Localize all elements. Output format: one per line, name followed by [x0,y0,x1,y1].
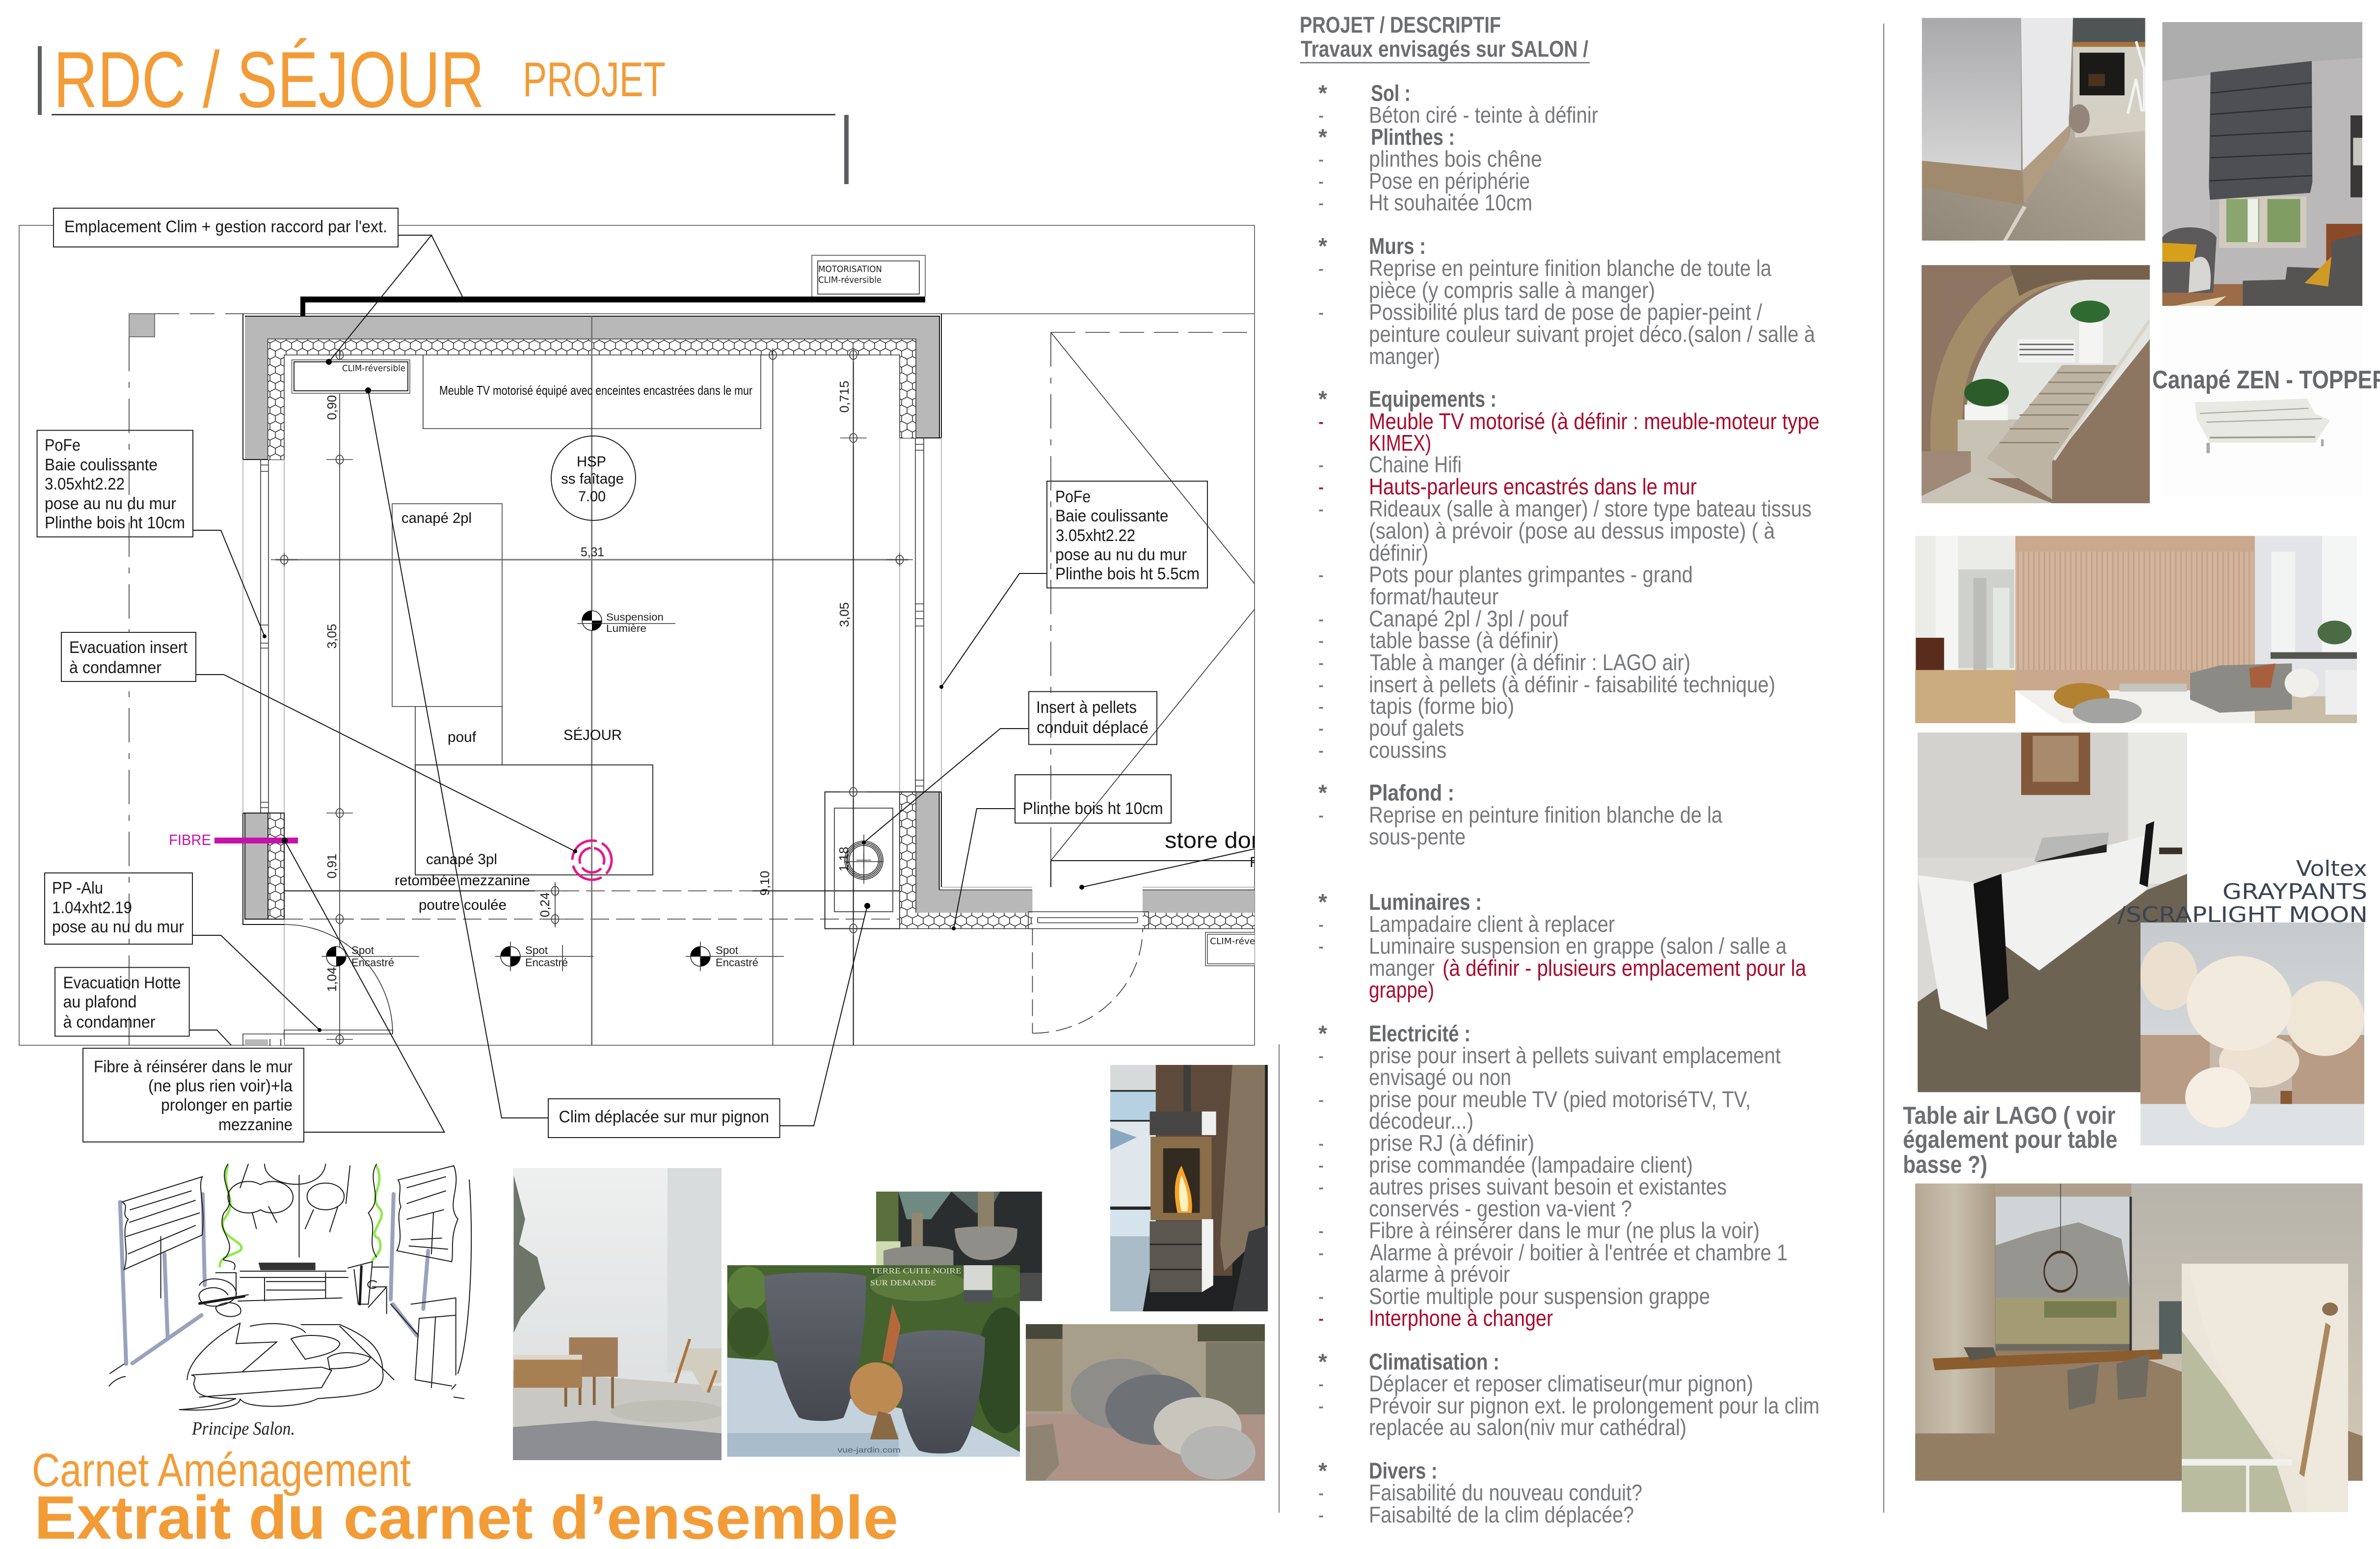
photo: sphères [1026,1324,1265,1481]
text block: équipements: - [1318,650,1324,675]
text block: plafond [1318,780,1722,849]
furniture: pouf: pouf [448,729,477,745]
text block: équipements: - [1318,672,1324,697]
text block: plafond: * [1318,780,1327,806]
callout: emplacement clim [53,208,398,247]
text block: équipements: - [1318,474,1324,499]
text block: équipements: Hauts-parleurs encastrés dans le mur [1369,474,1697,499]
text block: luminaires: - [1318,911,1324,937]
dimensions: 9,10 [757,871,772,896]
callout: évacuation hotte: au plafond [63,993,136,1011]
text block: sol et plinthes: plinthes bois chêne [1369,146,1542,172]
text block: sol et plinthes: Ht souhaitée 10cm [1369,190,1532,216]
sketch signature: Principe Salon. [191,1418,295,1439]
text block: équipements: Chaine Hifi [1369,452,1462,477]
photo: meuble TV [1918,733,2187,1092]
spot 2: Encastré [525,956,568,969]
text block: luminaires: Lampadaire client à replacer [1369,911,1615,937]
text block: sol et plinthes: Sol : [1371,81,1411,106]
text block: équipements: (salon) à prévoir (pose au dessus imposte) ( à [1369,518,1775,544]
dimensions: 1,18 [836,847,851,871]
text block: électricité [1318,1021,1788,1331]
text block: murs: Reprise en peinture finition blanche de toute la [1369,255,1771,281]
spot 2: Spot [525,944,548,956]
label: séjour: SÉJOUR [563,727,622,743]
spot 3: Spot [716,944,738,956]
text block: climatisation: - [1318,1371,1324,1396]
dimensions [324,380,852,992]
text block: équipements: - [1318,562,1324,587]
photo: poêle [1110,1065,1268,1311]
callout: insert à pellets: conduit déplacé [1037,718,1149,737]
furniture: canapé 2pl [392,504,502,707]
callout: PoFe droite [1047,481,1207,588]
text block: luminaires: Luminaire suspension en grappe (salon / salle a [1369,933,1787,959]
callout: plinthe bois: Plinthe bois ht 10cm [1023,799,1163,818]
clim box [292,360,410,393]
callout: fibre: Fibre à réinsérer dans le mur [94,1058,293,1076]
text block: sol et plinthes: * [1318,81,1327,106]
callout: PP-Alu: PP -Alu [52,879,103,897]
suspension symbol [577,611,675,634]
text block: électricité: prise pour insert à pellets suivant emplacement [1369,1043,1781,1068]
HSP circle: ss faîtage [561,471,624,487]
dimensions: 1,04 [324,967,339,992]
text block: divers: Faisabilité du nouveau conduit? [1369,1480,1642,1505]
label: table air LAGO: également pour table [1903,1126,2117,1153]
HSP circle: HSP [577,454,606,470]
callout: PoFe droite: 3.05xht2.22 [1056,526,1135,545]
descriptive column heading: Travaux envisagés sur SALON / [1301,36,1588,62]
spot 1: Spot [351,944,374,956]
vertical divider left [1279,1044,1280,1513]
text block: luminaires [1318,889,1806,1003]
dimensions: 0,91 [324,854,339,878]
label: voltex graypants: GRAYPANTS [2222,879,2367,904]
clim box bottom right: CLIM-réver [1210,936,1259,947]
text block: électricité: prise commandée (lampadaire client) [1369,1152,1693,1177]
text block: électricité: - [1318,1305,1324,1331]
text block: équipements: - [1318,715,1324,741]
text block: équipements: insert à pellets (à définir - faisabilité technique) [1369,672,1775,697]
text block: sol et plinthes: Béton ciré - teinte à définir [1369,102,1598,128]
text block: climatisation: * [1318,1349,1327,1375]
text block: électricité: prise RJ (à définir) [1369,1130,1534,1156]
text block: électricité: autres prises suivant besoin et existantes [1369,1174,1727,1199]
photo: plinthe [1922,18,2145,241]
label: retombée mezzanine: retombée mezzanine [395,872,530,889]
callout: PoFe droite: Plinthe bois ht 5.5cm [1055,565,1200,583]
motorisation box: MOTORISATION [818,264,882,274]
text block: luminaires: (à définir - plusieurs emplacement pour la [1443,955,1806,981]
callout: PoFe gauche [37,430,193,537]
text block: luminaires: grappe) [1369,977,1434,1003]
spot 3 [686,942,784,971]
callout: PoFe droite: PoFe [1055,488,1091,506]
text block: climatisation: Climatisation : [1369,1349,1499,1375]
photo: pots petits [876,1192,1042,1301]
text block: équipements: coussins [1369,737,1446,763]
text block: équipements: - [1318,496,1324,521]
callout: plinthe bois [1015,775,1171,823]
callout: PP-Alu: 1.04xht2.19 [52,898,132,917]
label: store dor: store dor [1165,827,1259,853]
insert à pellets symbol [845,841,883,879]
label: F: F [1250,854,1258,870]
text block: climatisation [1318,1349,1819,1440]
text block: électricité: Interphone à changer [1369,1305,1553,1331]
text block: sol et plinthes: - [1318,190,1324,216]
text block: murs: pièce (y compris salle à manger) [1369,277,1655,303]
text block: luminaires: manger [1369,955,1435,981]
text block: plafond: Plafond : [1369,780,1454,806]
clim box bottom right [1205,932,1255,966]
text block: murs: manger) [1369,344,1440,369]
text block: plafond: sous-pente [1369,824,1466,849]
label: poutre coulée: poutre coulée [419,897,507,913]
right wall and insert [825,792,900,929]
text block: murs: - [1318,255,1324,281]
text block: équipements: Pots pour plantes grimpantes - grand [1369,562,1693,587]
label: voltex graypants [2117,856,2368,927]
text block: plafond: Reprise en peinture finition blanche de la [1369,802,1722,828]
magenta target [565,833,619,887]
dimensions: 5,31 [581,544,604,559]
fibre marker: FIBRE [169,831,211,848]
text block: électricité: Alarme à prévoir / boitier à l'entrée et chambre 1 [1370,1240,1788,1265]
photo: pots noirs [727,1265,1020,1457]
text block: équipements: - [1318,452,1324,477]
text block: équipements: * [1318,386,1327,411]
text block: équipements: Canapé 2pl / 3pl / pouf [1369,606,1568,631]
furniture: canapé 3pl: canapé 3pl [426,851,497,868]
callout: PoFe gauche: PoFe [45,436,80,455]
text block: électricité: Electricité : [1369,1021,1471,1046]
photo: canapé blanc [2195,399,2330,453]
callout: clim déplacée: Clim déplacée sur mur pignon [559,1108,769,1126]
vertical divider right [1883,24,1884,1513]
text block: climatisation: Déplacer et reposer climatiseur(mur pignon) [1369,1371,1753,1396]
text block: électricité: conservés - gestion va-vient ? [1369,1196,1632,1222]
suspension symbol: Lumière [606,623,646,634]
label: table air LAGO: Table air LAGO ( voir [1903,1102,2115,1129]
callout: évacuation hotte: à condamner [63,1013,155,1032]
bottom titles: Carnet Aménagement [32,1444,411,1496]
text block: murs: - [1318,299,1324,325]
callout: insert à pellets [1029,692,1157,744]
photo: escalier béton [1922,265,2150,503]
callout: PoFe gauche: Baie coulissante [45,456,158,474]
text block: luminaires: * [1318,889,1327,915]
text block: sol et plinthes: - [1318,146,1324,172]
HSP circle: 7.00 [578,489,606,505]
callout: évacuation hotte: Evacuation Hotte [63,974,181,992]
label: voltex graypants: /SCRAPLIGHT MOON [2117,902,2368,927]
text block: murs: peinture couleur suivant projet déco.(salon / salle à [1369,322,1815,347]
text block: équipements: Meuble TV motorisé (à définir : meuble-moteur type [1369,408,1819,434]
text block: sol et plinthes: - [1318,168,1324,193]
text block: électricité: alarme à prévoir [1369,1261,1510,1287]
text block: électricité: - [1318,1174,1324,1199]
plan frame [19,225,1255,1045]
text block: équipements: - [1318,408,1324,434]
descriptive column heading: PROJET / DESCRIPTIF [1300,12,1501,38]
spot 1: Encastré [351,956,394,969]
callout: évacuation insert [61,632,196,681]
text block: divers: - [1318,1502,1324,1527]
label: table air LAGO: basse ?) [1903,1151,1987,1178]
label: voltex graypants: Voltex [2296,856,2367,881]
text block: électricité: - [1318,1130,1324,1156]
text block: divers: - [1318,1480,1324,1505]
text block: équipements [1318,386,1819,763]
text block: équipements: - [1318,627,1324,653]
thick clim line [300,297,925,316]
photo: rideaux [513,1168,722,1460]
callout: évacuation insert: à condamner [69,658,161,677]
text block: électricité: Sortie multiple pour suspension grappe [1369,1283,1710,1309]
callout: PP-Alu: pose au nu du mur [52,918,184,936]
furniture: meuble TV: Meuble TV motorisé équipé avec enceintes encastrées dans le mur [439,383,752,398]
motorisation box [812,255,925,297]
text block: équipements: pouf galets [1369,715,1464,741]
floor plan [19,208,1276,1142]
text block: divers: Faisabilté de la clim déplacée? [1369,1502,1634,1527]
plan walls and structure [129,314,1259,1046]
text block: murs [1318,233,1815,369]
sketch [109,1164,471,1410]
suspension symbol: Suspension [606,612,664,623]
text block: sol et plinthes [1318,81,1598,216]
callout: fibre [83,1048,304,1142]
descriptive column heading [1300,12,1590,63]
callout: évacuation hotte [55,967,189,1036]
text block: équipements: Equipements : [1369,386,1497,411]
text block: électricité: - [1318,1218,1324,1243]
callout: fibre: (ne plus rien voir)+la [148,1077,293,1095]
furniture: meuble TV [423,355,761,429]
dimensions: 3,05 [837,602,852,627]
text block: murs: Murs : [1369,233,1426,259]
furniture: pouf [415,707,502,765]
callout: évacuation insert: Evacuation insert [69,638,188,657]
title [38,35,849,184]
dimensions: 3,05 [324,624,339,649]
text block: climatisation: Prévoir sur pignon ext. le prolongement pour la clim [1369,1393,1819,1418]
text block: équipements: - [1318,693,1324,719]
text block: électricité: Fibre à réinsérer dans le mur (ne plus la voir) [1369,1218,1760,1243]
HSP circle [551,436,636,520]
callout: PoFe droite: pose au nu du mur [1055,545,1187,564]
photo: papier peint [1915,536,2357,725]
label: table air LAGO [1903,1102,2117,1178]
text block: équipements: Rideaux (salle à manger) / store type bateau tissus [1369,496,1812,521]
photo: suspensions [2140,923,2364,1145]
text block: plafond: - [1318,802,1324,828]
callout: fibre: prolonger en partie [161,1096,293,1114]
callout: PoFe gauche: 3.05xht2.22 [45,475,125,493]
text block: équipements: - [1318,737,1324,763]
clim box: CLIM-réversible [342,363,405,374]
photo: pots noirs: TERRE CUITE NOIRE [871,1267,962,1275]
text block: électricité: - [1318,1043,1324,1068]
photo: pots noirs: vue-jardin.com [837,1446,901,1454]
text block: électricité: - [1318,1240,1324,1265]
text block: sol et plinthes: Pose en périphérie [1369,168,1530,193]
callout: PP-Alu [45,873,192,944]
photo: rideau embrasse [2182,1264,2348,1512]
text block: murs: * [1318,233,1327,259]
photo: pots noirs: SUR DEMANDE [870,1278,936,1287]
text block: sol et plinthes: - [1318,102,1324,128]
spot 3: Encastré [716,956,758,969]
spot 2 [495,942,593,971]
text block: divers: Divers : [1369,1458,1437,1484]
furniture: canapé 2pl: canapé 2pl [401,510,472,526]
text block: luminaires: Luminaires : [1369,889,1482,915]
text block: luminaires: - [1318,933,1324,959]
text block: électricité: - [1318,1283,1324,1309]
title: RDC / SÉJOUR [53,35,484,124]
text block: électricité: * [1318,1021,1327,1046]
canapé ZEN panel [2152,306,2380,496]
callout: emplacement clim: Emplacement Clim + gestion raccord par l'ext. [64,217,387,236]
axes [275,559,909,561]
text block: climatisation: - [1318,1393,1324,1418]
text block: électricité: - [1318,1087,1324,1112]
text block: sol et plinthes: * [1318,124,1327,150]
text block: électricité: envisagé ou non [1369,1064,1511,1090]
text block: divers [1318,1458,1642,1527]
text block: équipements: Table à manger (à définir : LAGO air) [1370,650,1690,675]
title: PROJET [523,52,666,107]
fibre marker [169,831,298,848]
dimensions: 0,24 [537,893,552,917]
text block: électricité: - [1318,1152,1324,1177]
dimensions: 0,90 [324,395,339,420]
callout: PoFe gauche: Plinthe bois ht 10cm [45,514,185,532]
text block: équipements: table basse (à définir) [1370,627,1559,653]
text block: équipements: - [1318,606,1324,631]
text block: équipements: KIMEX) [1369,430,1431,456]
spot 1 [321,944,419,969]
text block: équipements: définir) [1369,540,1428,566]
text block: équipements: tapis (forme bio) [1370,693,1514,719]
leader lines [189,235,1047,1132]
text block: équipements: format/hauteur [1370,584,1498,609]
text block: divers: * [1318,1458,1327,1484]
callout: clim déplacée [548,1099,780,1138]
callout: fibre: mezzanine [218,1115,293,1134]
photo: table à manger [1915,1184,2363,1481]
text block: murs: Possibilité plus tard de pose de papier-peint / [1369,299,1762,325]
text block: climatisation: replacée au salon(niv mur cathédral) [1369,1414,1686,1440]
dimensions: 0,715 [837,380,852,413]
furniture: canapé 3pl [415,765,653,875]
text block: électricité: décodeur...) [1369,1108,1473,1134]
bottom titles [32,1444,898,1549]
text block: sol et plinthes: Plinthes : [1371,124,1455,150]
callout: PoFe droite: Baie coulissante [1055,507,1168,525]
callout: PoFe gauche: pose au nu du mur [45,494,176,513]
callout: insert à pellets: Insert à pellets [1036,698,1137,717]
motorisation box: CLIM-réversible [818,275,882,285]
photo: store bateau [2162,22,2362,306]
text block: électricité: prise pour meuble TV (pied motoriséTV, TV, [1369,1087,1751,1112]
